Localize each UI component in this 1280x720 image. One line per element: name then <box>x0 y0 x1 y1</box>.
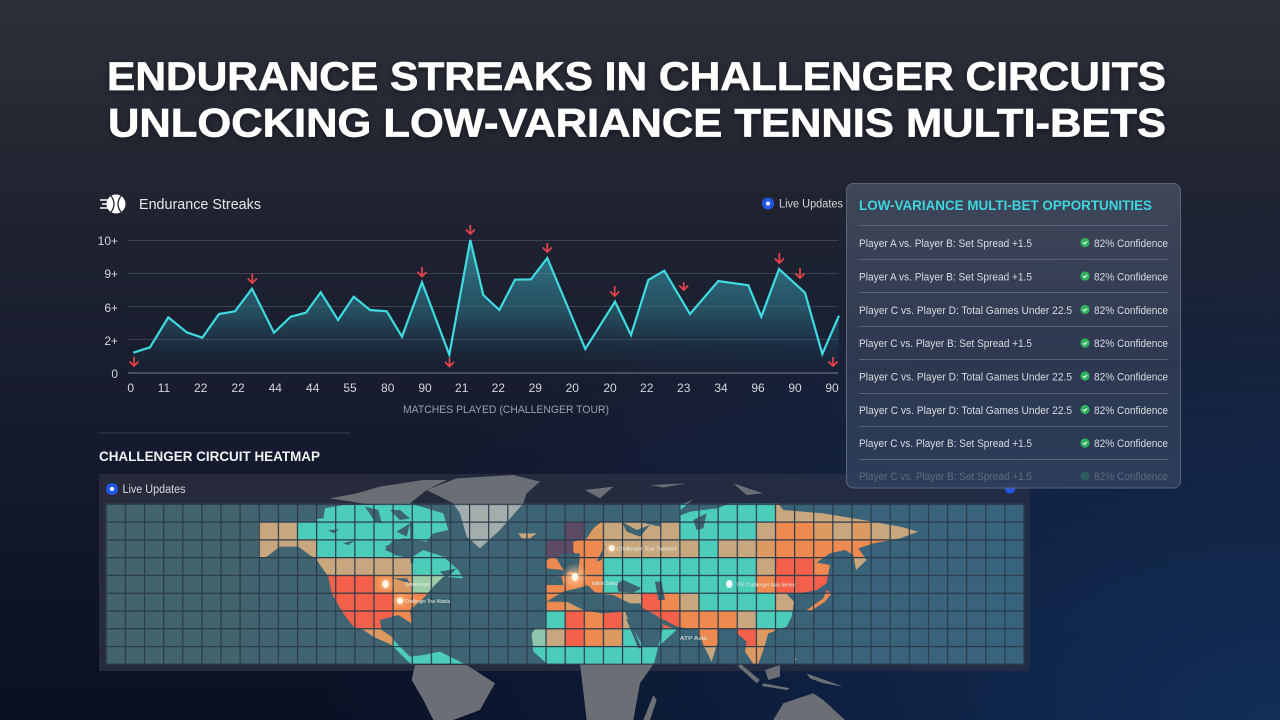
line chart: endurance streaks <box>98 194 843 416</box>
row 7: Player C vs. Player B: Set Spread +1.5 <box>859 438 1032 450</box>
row 8 faded: Player C vs. Player B: Set Spread +1.5 <box>859 471 1032 483</box>
city markers <box>377 541 795 642</box>
marker: north america one: Cleveland Open <box>405 582 430 588</box>
row 7: 82% Confidence <box>1094 438 1168 450</box>
x axis labels: 90 <box>418 381 432 395</box>
panel: heatmap <box>99 474 1030 720</box>
data line <box>133 240 839 355</box>
heatmap card <box>99 474 1030 671</box>
area under line <box>133 240 839 373</box>
blue dot behind opportunities panel <box>1004 482 1016 494</box>
row 3: Player C vs. Player D: Total Games Under 22.5 <box>859 305 1072 317</box>
row 1: 82% Confidence <box>1094 238 1168 250</box>
title: UNLOCKING LOW-VARIANCE TENNIS MULTI-BETS <box>108 102 1166 146</box>
marker: central asia <box>726 580 795 588</box>
marker: western europe: Italian Swing <box>592 581 618 587</box>
glass card <box>846 184 1180 488</box>
x axis labels: 80 <box>381 381 395 395</box>
title <box>107 55 1166 146</box>
x axis labels: 90 <box>825 381 839 395</box>
x axis labels: 44 <box>269 381 282 395</box>
row 6: 82% Confidence <box>1094 405 1168 417</box>
row 1 <box>859 238 1168 250</box>
x axis labels: 23 <box>677 381 691 395</box>
heatmap heading: CHALLENGER CIRCUIT HEATMAP <box>99 449 320 464</box>
y axis labels: 10+ <box>98 234 118 248</box>
x axis labels: 22 <box>231 381 245 395</box>
panel heading: LOW-VARIANCE MULTI-BET OPPORTUNITIES <box>859 198 1152 213</box>
x axis labels: 90 <box>788 381 802 395</box>
coloured land cells <box>259 504 928 664</box>
red arrow markers <box>130 225 838 366</box>
marker: north america two <box>392 593 451 609</box>
icon: speeding tennis ball <box>100 194 126 214</box>
x axis labels: 96 <box>751 381 765 395</box>
row 2 <box>859 271 1168 284</box>
grey world map land <box>330 475 845 720</box>
sea cells base <box>106 504 1023 664</box>
x axis labels: 22 <box>492 381 505 395</box>
row 8 faded <box>859 471 1168 483</box>
row 6: Player C vs. Player D: Total Games Under 22.5 <box>859 405 1072 417</box>
row 4 <box>859 338 1168 350</box>
row 4: 82% Confidence <box>1094 338 1168 350</box>
y axis labels: 6+ <box>104 301 118 315</box>
x axis labels: 22 <box>194 381 208 395</box>
row 2: 82% Confidence <box>1094 272 1168 284</box>
x axis labels: 55 <box>343 381 357 395</box>
row 5: 82% Confidence <box>1094 372 1168 384</box>
purple cells over the north sea <box>545 521 584 557</box>
y axis labels <box>98 234 118 381</box>
legend: live updates: Live Updates <box>779 198 843 210</box>
panel legend: live updates: Live Updates <box>122 484 186 496</box>
grid lines <box>128 240 838 373</box>
marker: northern europe <box>605 541 677 555</box>
inland seas <box>328 507 707 648</box>
x axis labels: 34 <box>714 381 728 395</box>
y axis labels: 9+ <box>104 267 118 281</box>
y axis labels: 2+ <box>104 334 118 348</box>
chart heading: Endurance Streaks <box>139 197 261 213</box>
row 8 faded: 82% Confidence <box>1094 471 1168 483</box>
x axis labels: 21 <box>455 381 469 395</box>
row 7 <box>859 438 1168 450</box>
title: ENDURANCE STREAKS IN CHALLENGER CIRCUITS <box>107 55 1166 99</box>
marker: north america two: Challenger Tour Atlanta <box>405 599 451 605</box>
y axis labels: 0 <box>111 367 118 381</box>
x axis labels: 11 <box>158 381 171 395</box>
x axis labels: 29 <box>529 381 542 395</box>
marker: north america one <box>377 575 430 593</box>
x axis labels: 44 <box>306 381 320 395</box>
panel: low-variance multi-bet opportunities <box>846 184 1180 488</box>
heat cell grid <box>106 504 1025 665</box>
x axis labels: 22 <box>640 381 654 395</box>
x axis labels: 0 <box>127 381 134 395</box>
row 5: Player C vs. Player D: Total Games Under 22.5 <box>859 372 1072 384</box>
marker: northern europe: Challenger Tour Tampere <box>617 546 677 552</box>
row 2: Player A vs. Player B: Set Spread +1.5 <box>859 272 1032 284</box>
row 1: Player A vs. Player B: Set Spread +1.5 <box>859 238 1032 250</box>
x axis title: MATCHES PLAYED (CHALLENGER TOUR) <box>403 404 609 416</box>
marker: western europe <box>561 563 618 591</box>
row 3: 82% Confidence <box>1094 305 1168 317</box>
x axis labels <box>127 381 839 395</box>
marker: central asia: ITF Challenger Asia Series <box>737 582 795 588</box>
x axis labels: 20 <box>603 381 617 395</box>
row 4: Player C vs. Player B: Set Spread +1.5 <box>859 338 1032 350</box>
label: south asia: ATP Asia <box>680 636 708 642</box>
row dividers <box>859 226 1168 460</box>
x axis labels: 20 <box>566 381 579 395</box>
